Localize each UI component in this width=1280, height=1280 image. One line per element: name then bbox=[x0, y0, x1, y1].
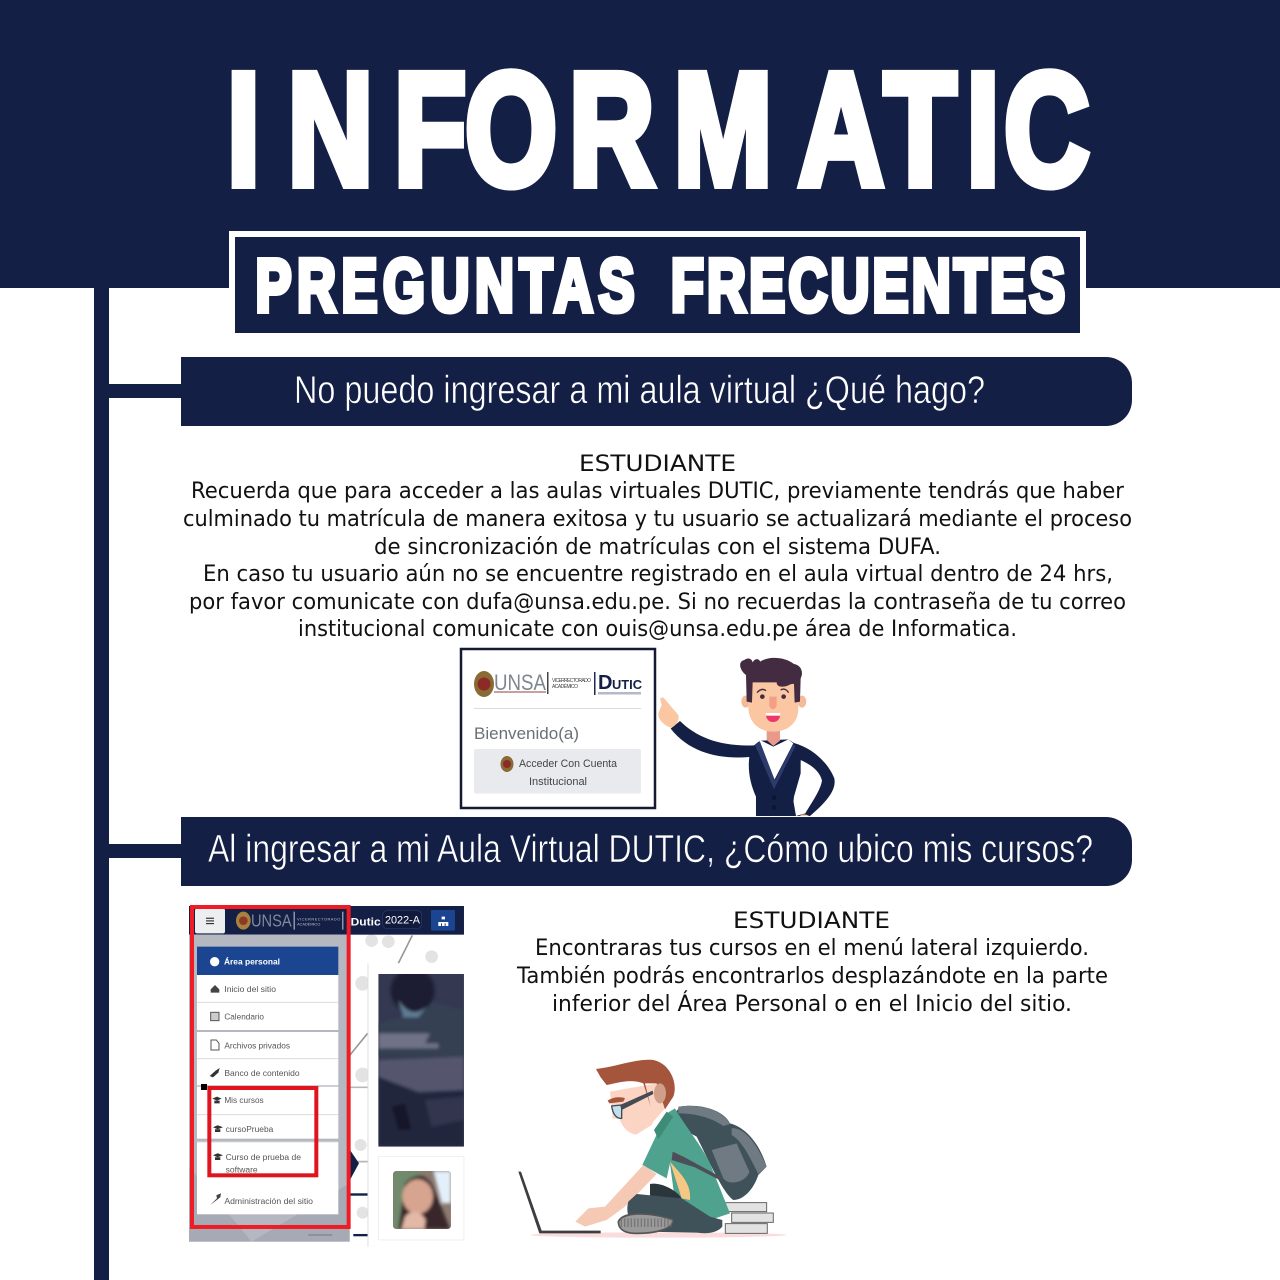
answer 1 text: institucional comunicate con ouis@unsa.edu.pe área de Informatica. bbox=[298, 617, 1017, 642]
login screenshot: Bienvenido(a) bbox=[474, 724, 579, 743]
subtitle box: PREGUNTAS bbox=[256, 243, 661, 327]
answer 1 text: Recuerda que para acceder a las aulas virtuales DUTIC, previamente tendrás que haber bbox=[191, 479, 1125, 504]
course menu screenshot: Calendario bbox=[224, 1012, 264, 1022]
course menu screenshot: Archivos privados bbox=[224, 1040, 290, 1050]
login screenshot: UTIC bbox=[612, 677, 643, 692]
answer 2 text: ESTUDIANTE bbox=[733, 909, 890, 934]
title: INFORMATIC bbox=[227, 40, 1090, 219]
question 1 heading: No puedo ingresar a mi aula virtual ¿Qué hago? bbox=[294, 369, 985, 412]
answer 2 text: inferior del Área Personal o en el Inicio del sitio. bbox=[552, 991, 1072, 1017]
header band bbox=[0, 0, 1280, 288]
login screenshot bbox=[461, 649, 655, 808]
answer 2 text: Encontraras tus cursos en el menú lateral izquierdo. bbox=[535, 936, 1089, 961]
course menu screenshot bbox=[189, 906, 464, 1247]
answer 2 text bbox=[516, 909, 1108, 1017]
login screenshot: Acceder Con Cuenta bbox=[519, 758, 618, 770]
answer 1 text: por favor comunicate con dufa@unsa.edu.pe. Si no recuerdas la contraseña de tu correo bbox=[189, 590, 1126, 615]
course menu screenshot: Administración del sitio bbox=[224, 1196, 313, 1206]
login screenshot: VICERRECTORADO bbox=[552, 678, 591, 684]
question 1 heading bbox=[109, 357, 1132, 426]
course menu screenshot: Inicio del sitio bbox=[224, 984, 276, 994]
question 2 heading bbox=[109, 817, 1132, 886]
course menu screenshot: UNSA bbox=[251, 911, 292, 931]
subtitle box bbox=[229, 231, 1086, 339]
answer 1 text: de sincronización de matrículas con el sistema DUFA. bbox=[374, 535, 941, 560]
login screenshot: UNSA bbox=[494, 670, 546, 695]
course menu screenshot: ACADÉMICO bbox=[297, 922, 320, 927]
answer 1 text: En caso tu usuario aún no se encuentre registrado en el aula virtual dentro de 24 hrs, bbox=[203, 562, 1113, 587]
login screenshot: ACADÉMICO bbox=[552, 683, 578, 690]
timeline vertical bar bbox=[94, 288, 109, 1280]
subtitle box: FRECUENTES bbox=[671, 243, 1068, 327]
answer 1 text: culminado tu matrícula de manera exitosa y tu usuario se actualizará mediante el proceso bbox=[183, 507, 1132, 532]
teacher illustration bbox=[658, 658, 835, 816]
answer 2 text: También podrás encontrarlos desplazándote en la parte bbox=[516, 964, 1108, 989]
answer 1 text bbox=[183, 452, 1132, 642]
course menu screenshot: Curso de prueba de bbox=[226, 1153, 302, 1162]
course menu screenshot: Mis cursos bbox=[224, 1096, 264, 1105]
student illustration bbox=[518, 1060, 787, 1238]
login screenshot: D bbox=[598, 672, 612, 694]
question 2 heading: Al ingresar a mi Aula Virtual DUTIC, ¿Cómo ubico mis cursos? bbox=[208, 828, 1093, 871]
course menu screenshot: Dutic bbox=[351, 916, 381, 928]
course menu screenshot: Banco de contenido bbox=[224, 1068, 300, 1078]
course menu screenshot: software bbox=[226, 1166, 258, 1175]
course menu screenshot: cursoPrueba bbox=[226, 1125, 274, 1134]
login screenshot: Institucional bbox=[529, 776, 587, 788]
answer 1 text: ESTUDIANTE bbox=[579, 452, 736, 477]
course menu screenshot: VICERRECTORADO bbox=[297, 916, 340, 921]
course menu screenshot: 2022-A bbox=[385, 915, 421, 927]
course menu screenshot: Área personal bbox=[224, 957, 280, 966]
